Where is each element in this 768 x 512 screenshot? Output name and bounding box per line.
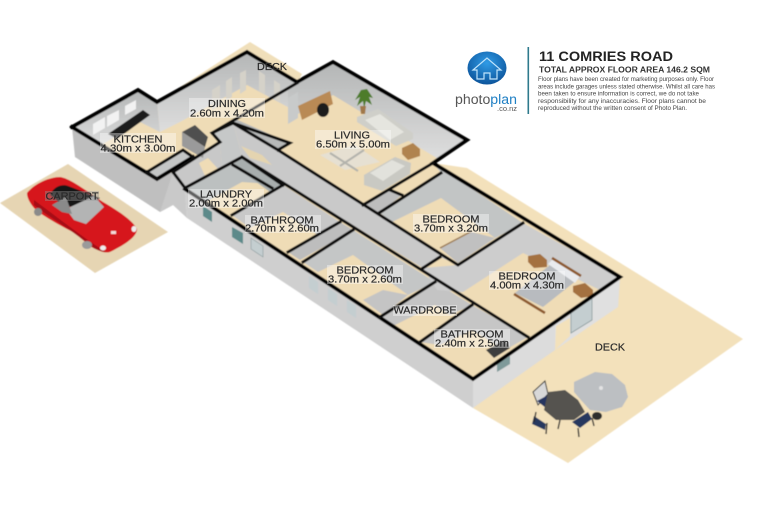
label: bedroom 3.70 x 2.60: 3.70m x 2.60m (328, 274, 402, 286)
bed in bedroom 3.70 x 3.20 (440, 231, 495, 263)
disclaimer text: Floor plans have been created for marketing purposes only. Floor (538, 77, 714, 83)
label: bedroom 4.00 (489, 271, 565, 292)
label: wardrobe: WARDROBE (394, 306, 457, 316)
label: kitchen (100, 133, 176, 154)
label: bathroom 2.70 (245, 215, 321, 234)
label: bathroom 2.40: BATHROOM (440, 330, 504, 340)
living room furniture (298, 89, 420, 191)
label: dining (189, 98, 265, 120)
label: main deck: DECK (595, 342, 625, 354)
disclaimer text: been taken to ensure information is correct, we do not take (538, 92, 700, 98)
label: dining: DINING (208, 99, 246, 110)
disclaimer text: responsibility for any inaccuracies. Floor plans cannot be (538, 99, 707, 105)
interior wall faces (72, 52, 620, 350)
logo wordmark: photoplan (455, 92, 517, 107)
disclaimer text (538, 77, 715, 112)
floor plan illustration (0, 42, 743, 463)
label: living: 6.50m x 5.00m (316, 140, 390, 150)
bed in bedroom 3.70 x 2.60 (363, 290, 408, 315)
disclaimer text: reproduced without the written consent of Photo Plan. (538, 106, 687, 112)
label: carport: CARPORT (46, 192, 99, 202)
label: bathroom 2.40: 2.40m x 2.50m (435, 338, 509, 350)
master bed (514, 254, 593, 313)
label: kitchen: 4.30m x 3.00m (100, 144, 176, 154)
heading: address: 11 COMRIES ROAD (539, 49, 673, 64)
label: bathroom 2.40 (434, 329, 510, 350)
exterior walls (72, 127, 620, 408)
label: laundry: LAUNDRY (200, 190, 252, 200)
logo domain: .co.nz (497, 104, 517, 113)
header divider (528, 47, 529, 114)
room labels (45, 62, 625, 354)
bathroom fixture (486, 340, 510, 358)
windows and kitchen bench (93, 70, 280, 158)
label: laundry (188, 189, 264, 210)
label: bedroom 3.70 x 3.20 (413, 214, 489, 234)
label: living: LIVING (334, 130, 370, 142)
icon: house in blue circle (468, 52, 506, 84)
label: bedroom 3.70 x 2.60 (327, 265, 403, 286)
label: bedroom 4.00: BEDROOM (498, 272, 556, 282)
label: dining: 2.60m x 4.20m (190, 108, 264, 120)
subheading: floor area: TOTAL APPROX FLOOR AREA 146.2 SQM (539, 66, 710, 74)
label: bathroom 2.70: 2.70m x 2.60m (245, 224, 319, 234)
main deck (433, 163, 743, 463)
logo: photoplan (455, 52, 517, 113)
label: kitchen: KITCHEN (114, 134, 162, 146)
label: bedroom 3.70 x 3.20: BEDROOM (422, 214, 480, 226)
wall top lines (72, 52, 620, 379)
label: bedroom 3.70 x 2.60: BEDROOM (336, 266, 394, 276)
label: laundry: 2.00m x 2.00m (189, 198, 263, 210)
disclaimer text: areas include garages unless stated otherwise. Whilst all care has (538, 84, 715, 90)
carport slab (0, 164, 168, 273)
label: bathroom 2.70: BATHROOM (250, 216, 314, 226)
label: bedroom 3.70 x 3.20: 3.70m x 3.20m (414, 224, 488, 234)
rear deck (157, 42, 302, 102)
patio table and umbrella (532, 372, 628, 437)
red car (27, 177, 137, 252)
floors (72, 52, 620, 379)
label: living (315, 130, 391, 150)
label: bedroom 4.00: 4.00m x 4.30m (490, 280, 564, 292)
label: rear deck: DECK (257, 62, 287, 73)
